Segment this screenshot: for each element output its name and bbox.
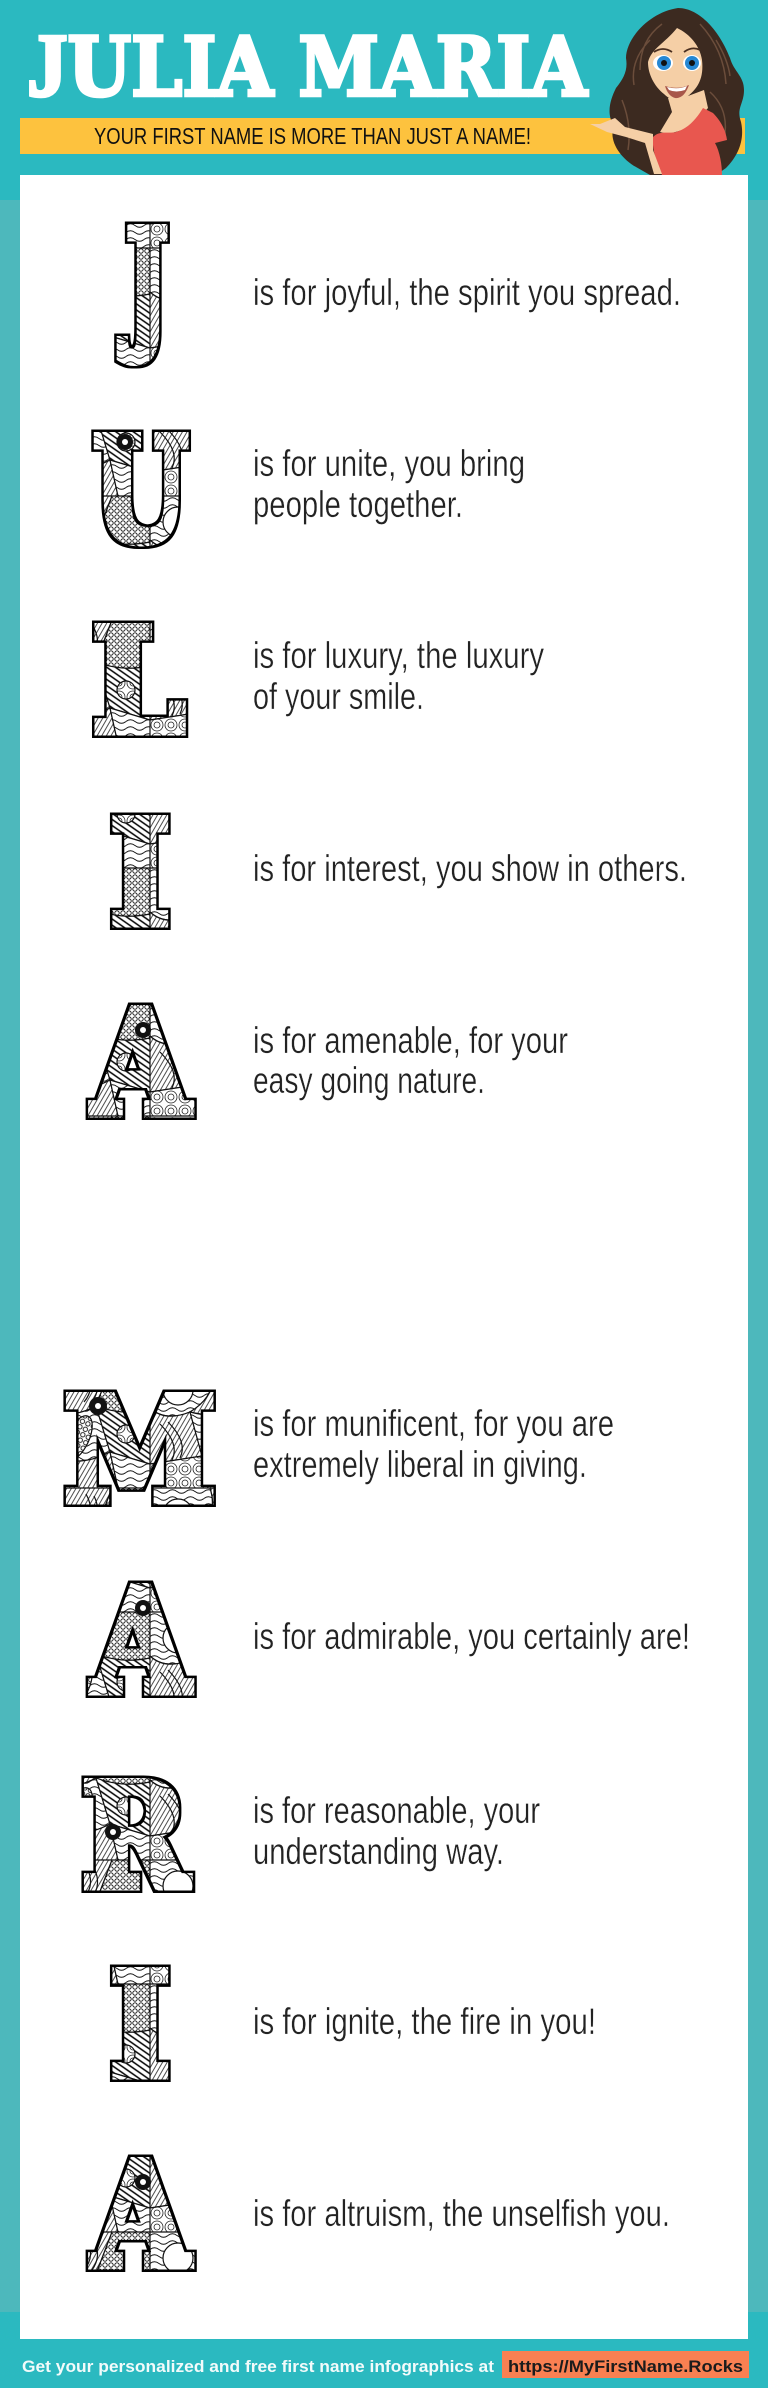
row L: [92, 599, 544, 765]
text: munificent: [253, 1403, 614, 1485]
footer link: https://MyFirstName.Rocks: [508, 2357, 743, 2376]
row I: [110, 1943, 596, 2109]
text: reasonable: understanding way.: [253, 1831, 504, 1872]
letter R: R: [82, 1754, 189, 1920]
title: JULIA MARIA: [27, 16, 588, 116]
text: reasonable: [253, 1790, 540, 1872]
letter L: L: [92, 599, 184, 765]
letter I: I: [110, 1943, 170, 2109]
letter I: I: [110, 791, 170, 957]
letter A: A: [91, 1559, 191, 1725]
row A: [91, 1559, 690, 1725]
text: munificent: is for munificent, for you are: [253, 1403, 614, 1444]
row I: [110, 791, 687, 957]
text: luxury: is for luxury, the luxury: [253, 635, 544, 676]
subtitle banner: YOUR FIRST NAME IS MORE THAN JUST A NAME!: [94, 123, 531, 149]
letter A: A: [91, 2133, 191, 2299]
text: unite: [253, 443, 525, 525]
text: amenable: is for amenable, for your: [253, 1020, 568, 1061]
row A: [91, 2133, 670, 2299]
text: altruism: is for altruism, the unselfish you.: [253, 2193, 670, 2234]
row J: [119, 200, 681, 366]
subtitle banner: [20, 118, 745, 154]
text: amenable: [253, 1020, 568, 1101]
row A: [91, 981, 568, 1147]
text: luxury: [253, 635, 544, 717]
text: reasonable: is for reasonable, your: [253, 1790, 540, 1831]
letter A: A: [91, 981, 191, 1147]
text: amenable: easy going nature.: [253, 1060, 485, 1101]
row U: [94, 408, 525, 574]
illustration: cartoon woman: [590, 8, 744, 175]
letter M: M: [64, 1368, 216, 1534]
letter J: J: [119, 200, 168, 366]
text: unite: people together.: [253, 484, 463, 525]
text: ignite: is for ignite, the fire in you!: [253, 2001, 596, 2042]
row M: [64, 1368, 614, 1534]
footer text: Get your personalized and free first name infographics at: [22, 2357, 494, 2376]
text: luxury: of your smile.: [253, 676, 424, 717]
footer: [22, 2351, 749, 2378]
letter U: U: [94, 408, 188, 574]
text: munificent: extremely liberal in giving.: [253, 1444, 587, 1485]
text: unite: is for unite, you bring: [253, 443, 525, 484]
row R: [82, 1754, 540, 1920]
footer link: [502, 2351, 749, 2378]
